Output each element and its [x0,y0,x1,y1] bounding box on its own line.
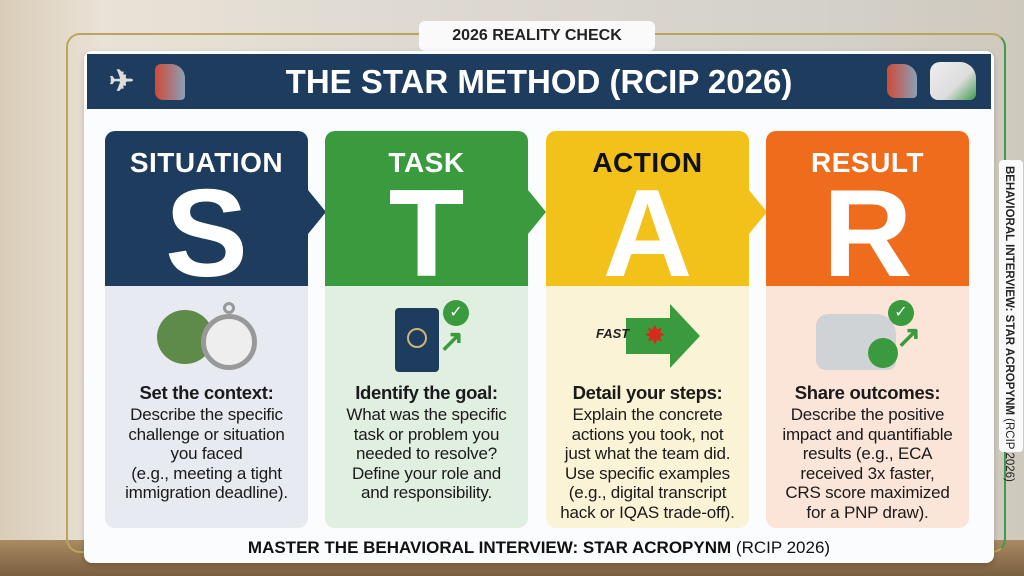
text: Detail your steps: [573,382,722,403]
main card [84,51,994,563]
icon: canada map right [930,62,976,100]
column T [325,131,528,528]
text: R [823,165,912,303]
icon: passport with check: ✓ [449,304,463,321]
text: for a PNP draw). [806,503,929,522]
icon: leaf and stopwatch [157,302,257,370]
title bar [87,54,991,109]
tag: 2026 reality check: 2026 REALITY CHECK [452,27,622,44]
text: received 3x faster, [800,464,935,483]
text: SITUATION [130,147,283,178]
text: actions you took, not [572,425,723,444]
title bar: THE STAR METHOD (RCIP 2026) [286,63,792,100]
text: Describe the positive [791,405,944,424]
text: CRS score maximized [785,483,950,502]
text: Describe the specific [130,405,283,424]
icon: passport with check: ↗ [439,325,464,358]
arrow T to A [528,190,546,234]
text: you faced [171,444,242,463]
text: immigration deadline). [125,483,288,502]
tag: 2026 reality check [419,21,655,51]
icon: fast arrow with maple leaf: FAST [596,326,629,341]
text: impact and quantifiable [782,425,953,444]
text: challenge or situation [128,425,285,444]
text: A [603,165,692,303]
text: Identify the goal: [355,382,498,403]
icon: passport with check [395,300,469,372]
column A [546,131,749,528]
column R [766,131,969,528]
text: and responsibility. [361,483,492,502]
side vertical label: BEHAVIORAL INTERVIEW: STAR ACROPYNM (RCIP 2026) [1003,166,1015,482]
text: just what the team did. [565,444,730,463]
text: TASK [388,147,465,178]
text: hack or IQAS trade-off). [560,503,735,522]
icon: fast arrow with maple leaf: ✸ [644,320,666,350]
text: S [165,165,248,303]
text: task or problem you [354,425,499,444]
icon: canada map with check: ✓ [894,304,908,321]
background floor [0,540,1024,576]
text: T [389,165,464,303]
text: needed to resolve? [356,444,497,463]
footer text: MASTER THE BEHAVIORAL INTERVIEW: STAR ACROPYNM (RCIP 2026) [248,538,830,557]
text: Share outcomes: [795,382,940,403]
text: Explain the concrete [572,405,723,424]
arrow S to T [308,190,326,234]
text: Set the context: [140,382,273,403]
column S [105,131,308,528]
arrow A to R [749,190,767,234]
side vertical label [999,160,1023,452]
text: Use specific examples [565,464,730,483]
text: ACTION [592,147,703,178]
icon: plane: ✈ [109,65,134,98]
text: (e.g., meeting a tight [131,464,282,483]
icon: canada map with check [816,300,921,370]
text: What was the specific [346,405,507,424]
icon: fast arrow with maple leaf [596,304,700,368]
text: RESULT [811,147,924,178]
icon: canada map with check: ↗ [896,321,921,354]
text: (e.g., digital transcript [569,483,726,502]
icon: maps right [887,64,917,98]
text: Define your role and [352,464,501,483]
text: results (e.g., ECA [803,444,932,463]
icon: map left [155,64,185,100]
